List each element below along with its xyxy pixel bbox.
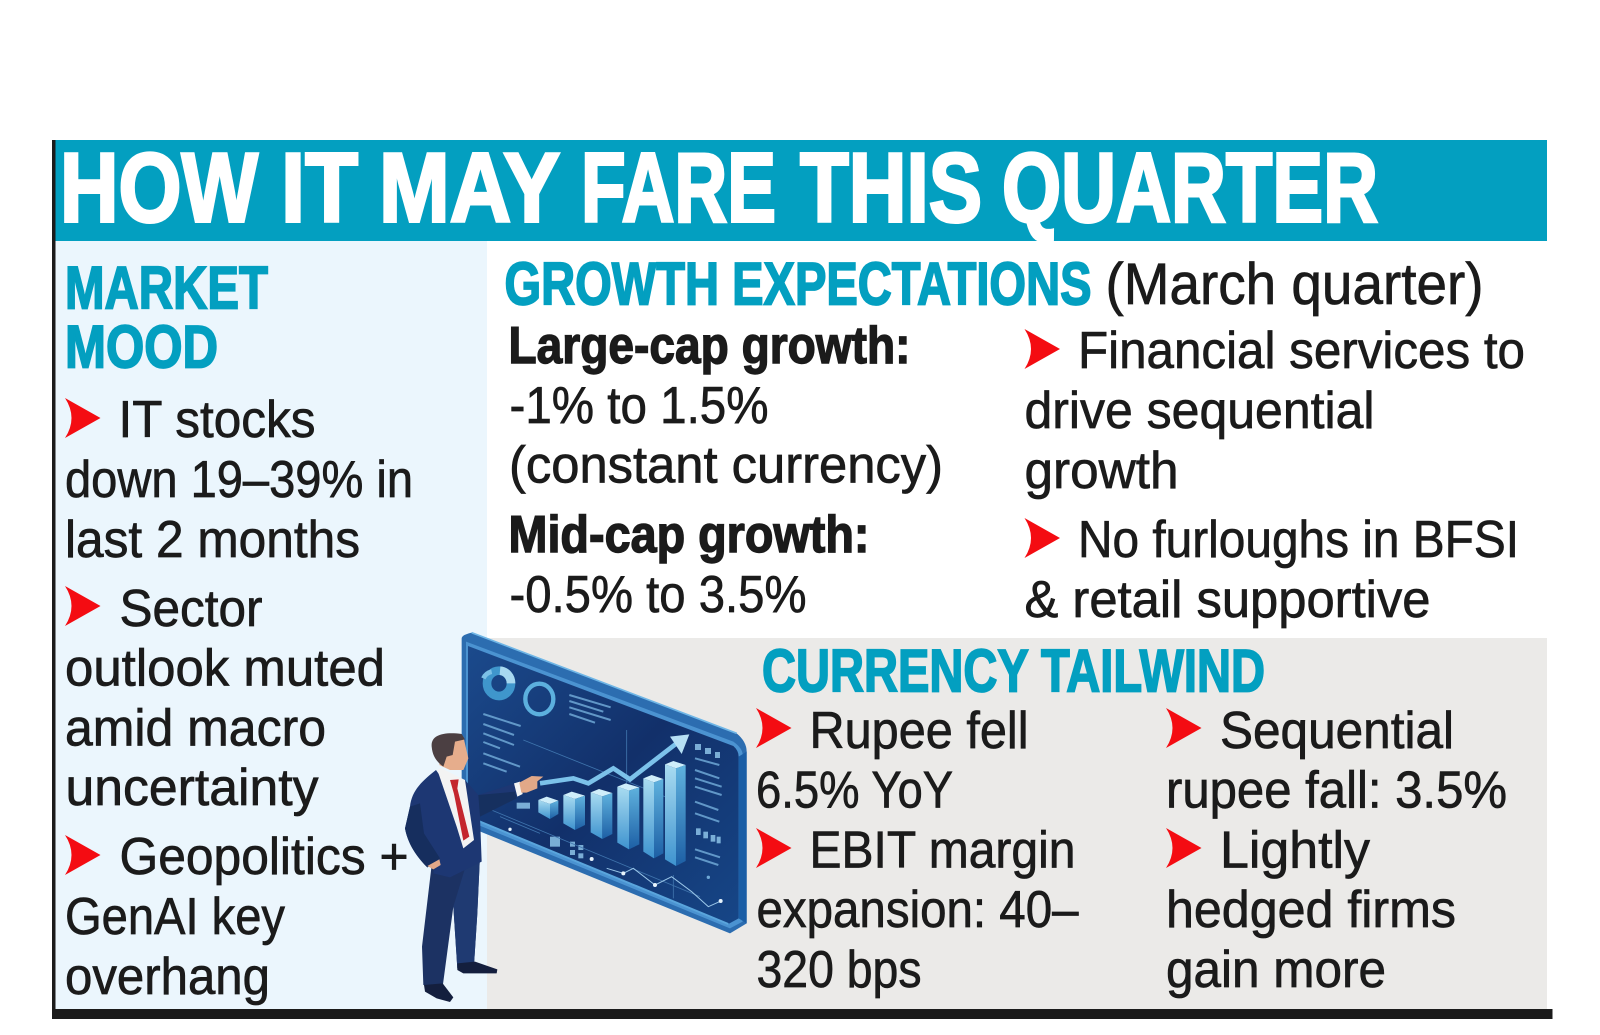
- bullet: lightly hedged firms: gain more: [1166, 941, 1386, 999]
- panel: growth expectations: [504, 250, 1525, 629]
- shoes: [457, 962, 497, 973]
- bullet: financial services: [1024, 322, 1525, 500]
- bullet: lightly hedged firms: Lightly: [1220, 822, 1370, 880]
- title: IT: [281, 132, 358, 242]
- bullet: no furloughs: [1024, 511, 1519, 629]
- heading: currency tailwind: CURRENCY TAILWIND: [762, 638, 1265, 704]
- bullet: EBIT margin: 320 bps: [756, 941, 922, 999]
- grid lines: [483, 730, 700, 898]
- tie: [450, 779, 469, 841]
- bullet: geopolitics: Geopolitics +: [120, 828, 408, 886]
- left border line: [52, 140, 56, 1010]
- bullet: lightly hedged firms: hedged firms: [1166, 881, 1456, 939]
- mid-cap growth: -0.5% to 3.5%: [510, 566, 806, 624]
- bullet: EBIT margin: [756, 822, 1079, 999]
- bullet: sequential rupee fall: rupee fall: 3.5%: [1166, 762, 1507, 820]
- screen small blocks: [517, 744, 721, 858]
- title: THIS: [800, 132, 982, 242]
- heading: growth expectations: GROWTH EXPECTATIONS: [504, 250, 1092, 318]
- jacket: [405, 770, 517, 877]
- trousers: [422, 855, 480, 987]
- chart: rising line with arrow: [540, 741, 680, 783]
- title: [60, 132, 1378, 242]
- bullet: sector outlook: amid macro: [65, 700, 326, 758]
- heading: market mood: [65, 254, 268, 380]
- bullet: rupee fell: Rupee fell: [810, 702, 1028, 760]
- title banner: [52, 132, 1547, 242]
- icon: businessman: [405, 733, 543, 1002]
- large-cap growth: (constant currency): [509, 436, 943, 494]
- shirt and collar: [437, 768, 474, 848]
- head: [439, 737, 468, 770]
- bullet: no furloughs: & retail supportive: [1024, 571, 1430, 629]
- large-cap growth: Large-cap growth:: [508, 317, 910, 375]
- bullet: rupee fell: 6.5% YoY: [756, 762, 953, 820]
- mid-cap growth: Mid-cap growth:: [508, 506, 870, 564]
- bullet: financial services: Financial services to: [1078, 322, 1525, 380]
- icon: dashboard screen: [462, 633, 747, 933]
- bullet: EBIT margin: expansion: 40–: [756, 881, 1079, 939]
- bullet: EBIT margin: EBIT margin: [810, 822, 1076, 880]
- chart: donut charts: [483, 671, 553, 714]
- bullet: sequential rupee fall: [1166, 702, 1507, 820]
- bullet: IT stocks: IT stocks: [118, 391, 316, 449]
- illustration: businessman presenting dashboard: [405, 633, 747, 1002]
- mid-cap growth: [508, 506, 870, 624]
- bullet: financial services: drive sequential: [1024, 382, 1374, 440]
- bullet: IT stocks: down 19–39% in: [65, 451, 413, 509]
- heading: growth expectations: (March quarter): [1106, 252, 1484, 317]
- bullet: geopolitics: GenAI key: [65, 888, 285, 946]
- large-cap growth: [508, 317, 943, 494]
- bullet: sector outlook: outlook muted: [65, 640, 385, 698]
- bullet: financial services: growth: [1024, 442, 1178, 500]
- title: FARE: [581, 132, 776, 242]
- bottom border bar: [52, 1009, 1552, 1019]
- chart: 3D bars: [538, 761, 686, 866]
- bullet: rupee fell: [756, 702, 1028, 820]
- bullet: geopolitics: overhang: [65, 948, 270, 1006]
- cuffs and hands: [514, 782, 523, 797]
- bullet: sequential rupee fall: Sequential: [1220, 702, 1454, 760]
- bullet: IT stocks: [65, 391, 413, 569]
- screen text lines: [483, 695, 722, 865]
- bullet: sector outlook: [65, 580, 385, 817]
- bullet: geopolitics: [65, 828, 408, 1006]
- heading: market mood: MARKET: [65, 254, 268, 322]
- bullet: IT stocks: last 2 months: [65, 511, 360, 569]
- chart: lower sparkline: [508, 828, 723, 907]
- panel: market mood background: [55, 240, 487, 1010]
- large-cap growth: -1% to 1.5%: [510, 377, 768, 435]
- title: MAY: [379, 132, 560, 242]
- bullet: sector outlook: Sector: [120, 580, 262, 638]
- panel: currency tailwind background: [487, 638, 1547, 1010]
- heading: market mood: MOOD: [65, 314, 218, 380]
- bullet: sector outlook: uncertainty: [66, 759, 318, 817]
- panel: currency tailwind: [756, 638, 1507, 999]
- bullet: no furloughs: No furloughs in BFSI: [1078, 511, 1519, 569]
- title: QUARTER: [1002, 132, 1378, 242]
- title: HOW: [60, 132, 258, 242]
- bullet: lightly hedged firms: [1166, 822, 1456, 999]
- panel: market mood: [65, 254, 413, 1006]
